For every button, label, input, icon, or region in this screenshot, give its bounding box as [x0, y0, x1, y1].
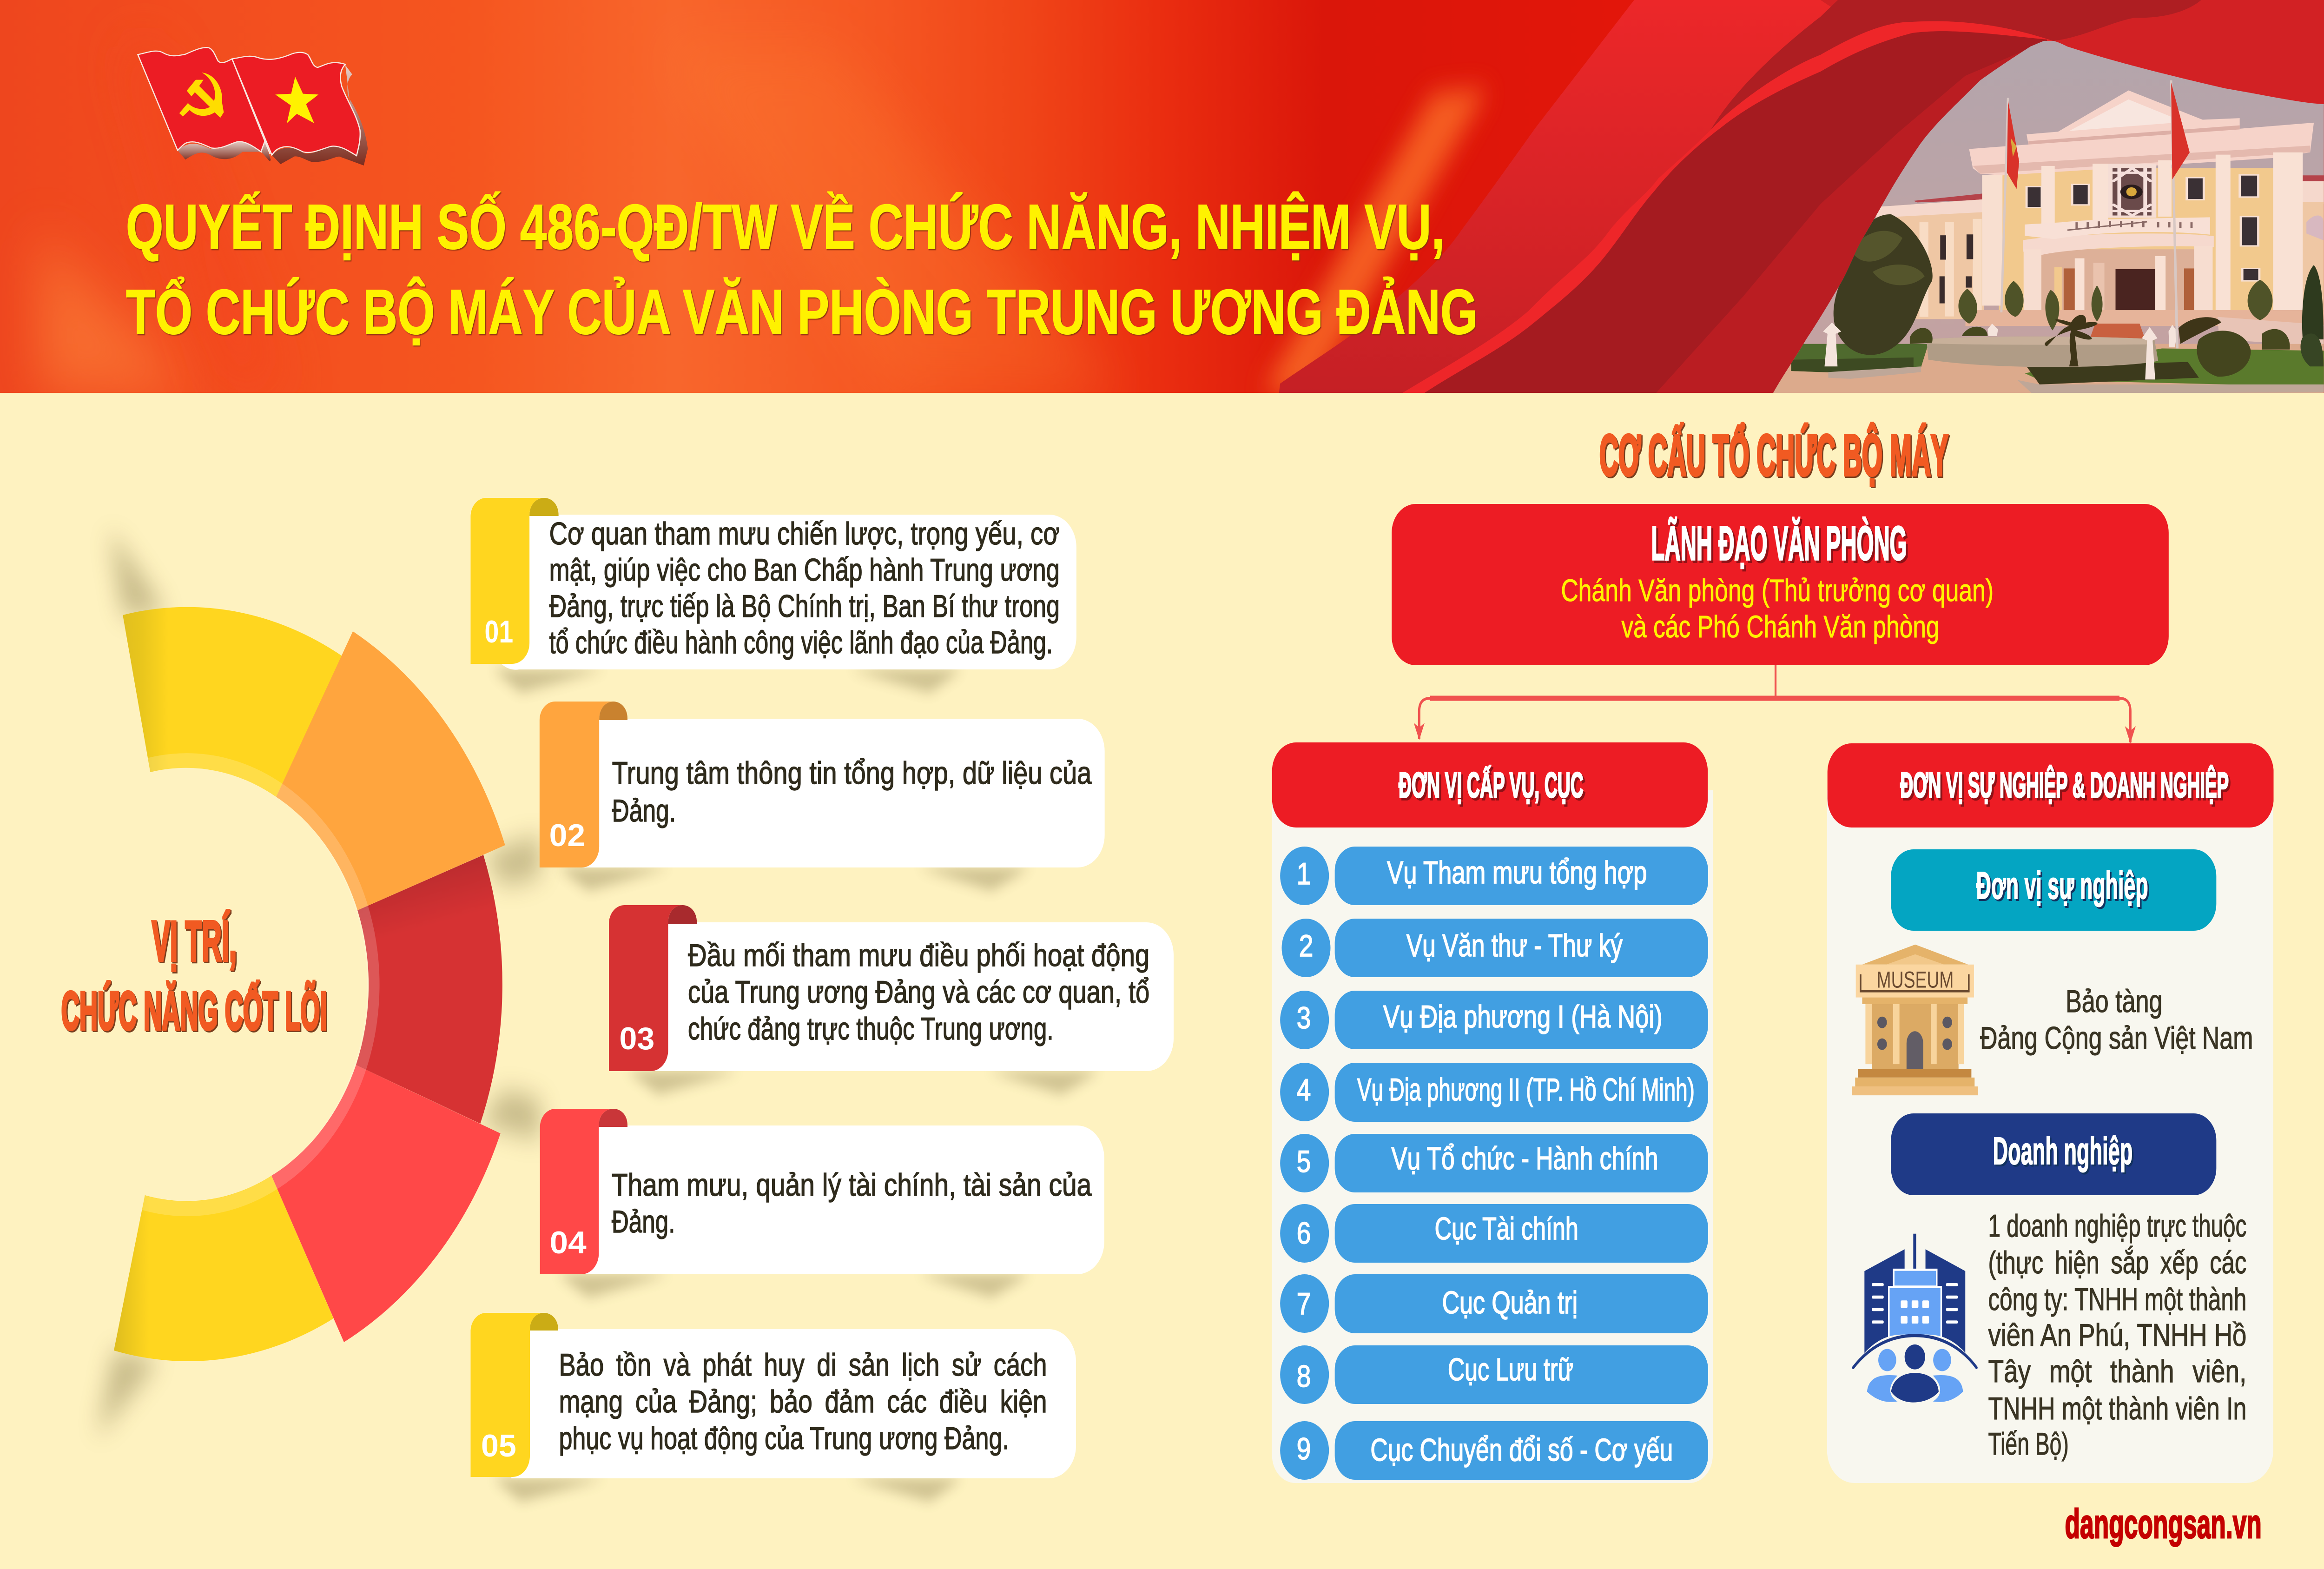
flag underside right	[272, 65, 368, 166]
row 3	[1280, 991, 1708, 1049]
card 01: 01	[484, 614, 513, 649]
row 6	[1280, 1204, 1708, 1263]
header banner	[0, 0, 2324, 395]
card 02 text: Trung tâm thông tin tổng hợp, dữ liệu của	[612, 755, 1092, 791]
center label	[61, 909, 327, 1041]
row 2: 2	[1299, 928, 1313, 963]
leadership line 1: Chánh Văn phòng (Thủ trưởng cơ quan)	[1561, 573, 1994, 608]
enterprise description: Tiến Bộ)	[1988, 1426, 2069, 1462]
title line 1: QUYẾT ĐỊNH SỐ 486-QĐ/TW VỀ CHỨC NĂNG, NHIỆM VỤ,	[126, 191, 1445, 262]
card 05	[470, 1313, 1076, 1502]
card 04 text	[612, 1167, 1092, 1239]
title	[126, 191, 1478, 347]
card 05 text: Bảo tồn và phát huy di sản lịch sử cách	[559, 1347, 1047, 1383]
row 9: 9	[1297, 1431, 1311, 1466]
segment: top yellow	[123, 607, 342, 797]
row 9: Cục Chuyển đổi số - Cơ yếu	[1370, 1432, 1673, 1468]
flag: yellow star	[232, 53, 360, 156]
row 3: Vụ Địa phương I (Hà Nội)	[1383, 999, 1663, 1034]
ribbon: dark upper blob	[1711, 0, 2201, 130]
card 02: 02	[549, 818, 585, 853]
row 1	[1280, 847, 1708, 905]
button: enterprise: Doanh nghiệp	[1993, 1130, 2133, 1172]
panel: leadership box	[1392, 504, 2169, 665]
card 03: 03	[619, 1021, 654, 1056]
card 03 text: Đầu mối tham mưu điều phối hoạt động	[688, 938, 1149, 973]
card 05: 05	[481, 1428, 516, 1463]
icon: party and national flags	[138, 47, 368, 166]
museum label: Bảo tàng	[2066, 984, 2163, 1019]
card 01 text: Đảng, trực tiếp là Bộ Chính trị, Ban Bí thư trong	[549, 589, 1060, 624]
card 02 text	[612, 755, 1092, 828]
card 05 text: mạng của Đảng; bảo đảm các điều kiện	[559, 1384, 1047, 1419]
row 4: 4	[1297, 1072, 1311, 1107]
ribbon: crimson sweep	[1279, 0, 1937, 393]
segment: dark red	[356, 855, 502, 1124]
panel: departments	[1272, 742, 1713, 1483]
row 8: Cục Lưu trữ	[1448, 1352, 1573, 1387]
card 01	[470, 498, 1076, 693]
card 03 text	[688, 938, 1149, 1046]
ribbon: bright stripe	[1403, 21, 2053, 393]
row 4: Vụ Địa phương II (TP. Hồ Chí Minh)	[1357, 1072, 1695, 1107]
row 7: 7	[1297, 1286, 1311, 1321]
row 7	[1280, 1274, 1708, 1333]
button: public service unit	[1891, 849, 2216, 931]
card 05 text: phục vụ hoạt động của Trung ương Đảng.	[559, 1421, 1009, 1456]
segment: red	[271, 1065, 501, 1342]
row 2	[1282, 919, 1708, 977]
enterprise description: viên An Phú, TNHH Hồ	[1988, 1317, 2246, 1353]
label line 1: VỊ TRÍ,	[152, 909, 237, 973]
enterprise description: TNHH một thành viên In	[1988, 1391, 2246, 1426]
card 01 text: tổ chức điều hành công việc lãnh đạo của Đảng.	[549, 625, 1053, 660]
panel: departments: ĐƠN VỊ CẤP VỤ, CỤC	[1399, 766, 1584, 805]
card 01 text: mật, giúp việc cho Ban Chấp hành Trung ương	[549, 552, 1060, 588]
enterprises header	[1828, 743, 2274, 828]
row 1: 1	[1297, 856, 1311, 891]
card 05 text	[559, 1347, 1047, 1456]
heading: organisation structure: CƠ CẤU TỔ CHỨC BỘ MÁY	[1599, 423, 1948, 488]
enterprise description: Tây một thành viên,	[1988, 1354, 2246, 1389]
inner highlight band	[143, 761, 373, 1209]
row 5: Vụ Tổ chức - Hành chính	[1391, 1141, 1658, 1176]
flag: hammer and sickle	[138, 47, 270, 154]
icon: enterprise building and people	[1853, 1234, 1977, 1415]
label line 2: CHỨC NĂNG CỐT LÕI	[61, 980, 327, 1041]
panel: public service units and enterprises	[1827, 743, 2274, 1483]
departments header	[1272, 742, 1708, 828]
card 04: 04	[549, 1225, 587, 1260]
enterprise description: (thực hiện sắp xếp các	[1988, 1245, 2246, 1280]
connector arrows	[1414, 665, 2136, 743]
ribbon: top right band	[1821, 0, 2324, 149]
row 8	[1280, 1345, 1708, 1404]
leadership title: LÃNH ĐẠO VĂN PHÒNG	[1651, 517, 1907, 570]
card 03 text: chức đảng trực thuộc Trung ương.	[688, 1011, 1054, 1046]
card 04 text: Tham mưu, quản lý tài chính, tài sản của	[612, 1167, 1092, 1203]
enterprise description: 1 doanh nghiệp trực thuộc	[1988, 1208, 2246, 1244]
card 04 text: Đảng.	[612, 1204, 675, 1239]
card 01 text	[549, 516, 1060, 660]
icon: museum	[1852, 945, 1978, 1095]
panel: ring diagram	[61, 530, 540, 1437]
enterprise description: công ty: TNHH một thành	[1988, 1282, 2246, 1317]
museum label: Đảng Cộng sản Việt Nam	[1980, 1020, 2253, 1056]
button: public service unit: Đơn vị sự nghiệp	[1976, 864, 2148, 907]
icon: museum: MUSEUM	[1877, 967, 1954, 993]
row 5	[1280, 1134, 1708, 1192]
card 02 text: Đảng.	[612, 793, 676, 828]
title line 2: TỔ CHỨC BỘ MÁY CỦA VĂN PHÒNG TRUNG ƯƠNG ĐẢNG	[126, 276, 1478, 347]
card 03	[609, 905, 1174, 1094]
card 03 text: của Trung ương Đảng và các cơ quan, tổ	[688, 974, 1149, 1010]
card 04	[540, 1109, 1104, 1298]
leadership line 2: và các Phó Chánh Văn phòng	[1621, 609, 1939, 644]
ribbon: dark main band	[1425, 31, 2047, 393]
flag underside shadow	[178, 141, 271, 161]
segment: orange	[276, 631, 505, 910]
photo: party office building	[1706, 41, 2324, 395]
row 7: Cục Quản trị	[1442, 1285, 1578, 1320]
ring fold shadows	[97, 530, 540, 1437]
row 6: Cục Tài chính	[1435, 1211, 1578, 1246]
segment: bottom yellow	[114, 1176, 334, 1361]
row 2: Vụ Văn thư - Thư ký	[1406, 928, 1623, 963]
row 4	[1280, 1063, 1708, 1122]
card 02	[540, 702, 1105, 891]
row 1: Vụ Tham mưu tổng hợp	[1387, 855, 1647, 890]
row 5: 5	[1297, 1144, 1311, 1178]
button: enterprise	[1891, 1113, 2216, 1195]
card 01 text: Cơ quan tham mưu chiến lược, trọng yếu, cơ	[549, 516, 1060, 551]
row 8: 8	[1297, 1359, 1311, 1393]
row 6: 6	[1297, 1216, 1311, 1250]
row 9	[1280, 1421, 1708, 1480]
museum label	[1980, 984, 2253, 1056]
row 3: 3	[1297, 1000, 1311, 1035]
ribbon: lighter edge band	[1656, 41, 2047, 393]
enterprise description	[1988, 1208, 2246, 1462]
